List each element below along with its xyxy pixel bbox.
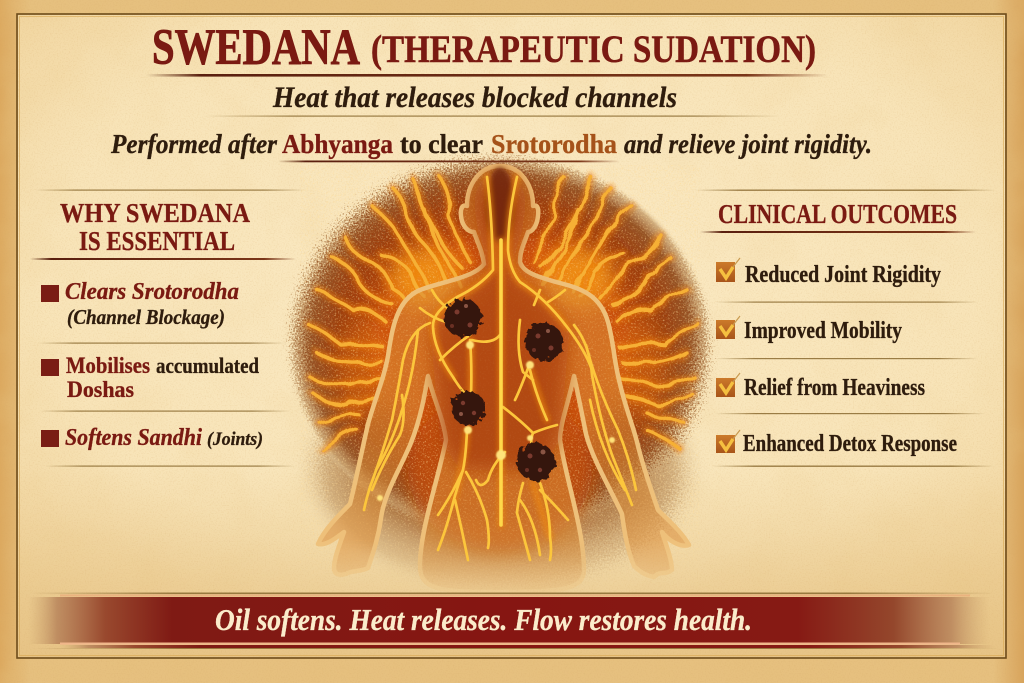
item: softens sandhi xyxy=(41,425,263,451)
blockage cluster 1 xyxy=(444,299,482,337)
bright sparks xyxy=(377,341,615,501)
subtitle: Heat that releases blocked channels xyxy=(272,81,677,114)
spine channel xyxy=(499,240,503,525)
intro sentence: Abhyanga xyxy=(282,129,393,159)
item: reduced joint rigidity: Reduced Joint Rigidity xyxy=(745,262,941,288)
item: softens sandhi: Softens Sandhi xyxy=(65,425,202,451)
intro sentence: Performed after xyxy=(110,129,277,159)
heat aura xyxy=(288,155,712,600)
heading: why swedana: IS ESSENTIAL xyxy=(79,226,235,256)
item: relief from heaviness: Relief from Heaviness xyxy=(744,375,925,401)
panel: why swedana is essential xyxy=(30,190,305,467)
item: mobilises doshas xyxy=(41,353,259,402)
title: (THERAPEUTIC SUDATION) xyxy=(371,28,816,71)
title xyxy=(152,20,816,76)
item: clears srotorodha: (Channel Blockage) xyxy=(67,305,225,329)
item: mobilises doshas: Mobilises xyxy=(66,353,150,378)
heading: why swedana xyxy=(60,198,250,256)
item: enhanced detox response: Enhanced Detox Response xyxy=(743,431,957,457)
intro sentence: Srotorodha xyxy=(491,129,617,159)
banner text: Oil softens. Heat releases. Flow restores health. xyxy=(215,602,752,637)
blockage cluster 3 xyxy=(451,391,485,425)
item: relief from heaviness xyxy=(716,373,925,401)
footer banner xyxy=(28,592,1000,649)
blockage cluster 4 xyxy=(517,443,555,481)
intro sentence: and relieve joint rigidity. xyxy=(624,129,872,159)
blockage cluster 2 xyxy=(525,323,563,361)
item: softens sandhi: (Joints) xyxy=(207,429,263,450)
illustration: glowing human body with blocked channels xyxy=(288,155,712,600)
item: improved mobility xyxy=(716,316,902,344)
title: SWEDANA xyxy=(152,20,360,76)
intro sentence xyxy=(110,129,872,159)
item: reduced joint rigidity xyxy=(716,258,941,288)
body silhouette xyxy=(318,166,689,592)
item: mobilises doshas: accumulated xyxy=(156,353,259,378)
item: enhanced detox response xyxy=(716,430,957,457)
heading: clinical outcomes: CLINICAL OUTCOMES xyxy=(718,199,957,229)
item: mobilises doshas: Doshas xyxy=(67,377,134,402)
heading: why swedana: WHY SWEDANA xyxy=(60,198,250,228)
energy channels xyxy=(364,177,636,560)
intro sentence: to clear xyxy=(400,129,483,159)
panel: clinical outcomes xyxy=(695,190,995,467)
item: clears srotorodha xyxy=(41,279,239,329)
heat rays xyxy=(307,177,697,450)
item: clears srotorodha: Clears Srotorodha xyxy=(65,279,239,305)
item: improved mobility: Improved Mobility xyxy=(744,318,902,344)
